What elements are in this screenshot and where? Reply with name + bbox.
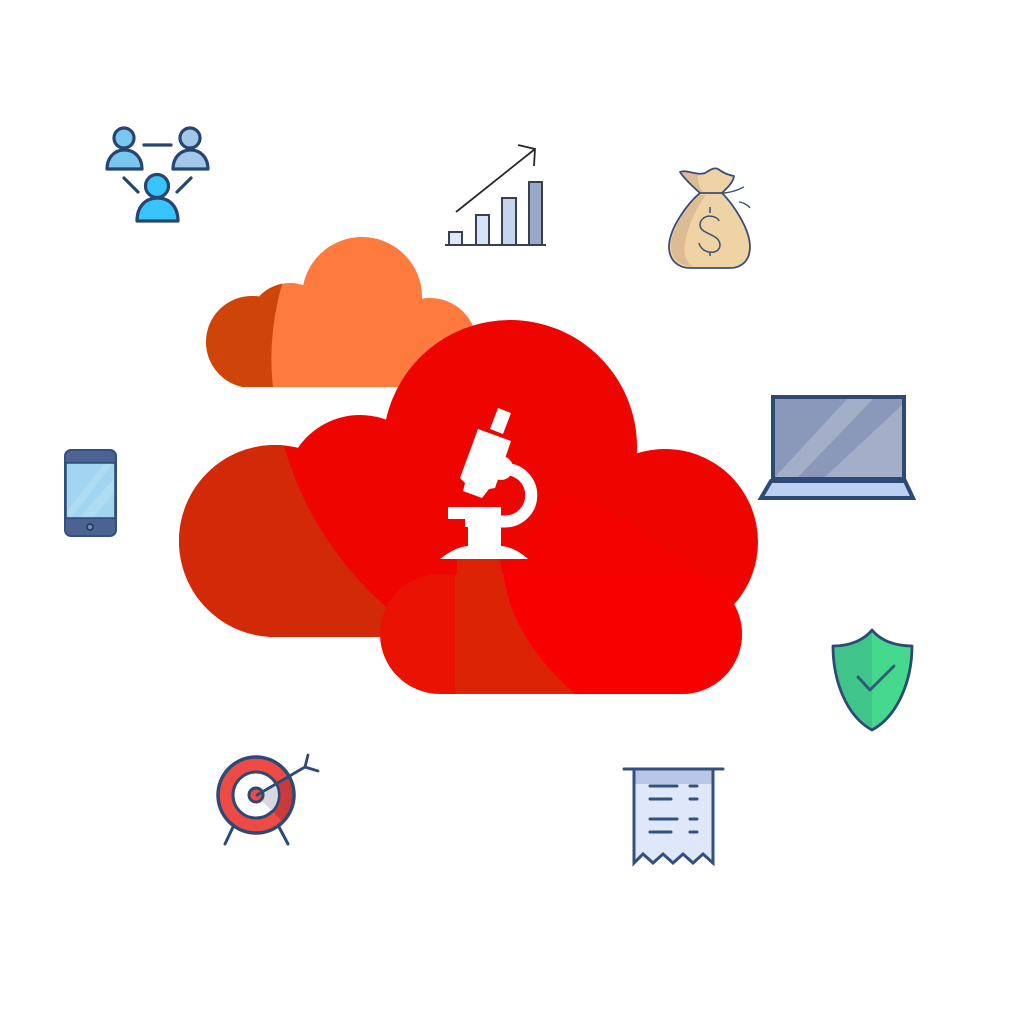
main red cloud — [170, 310, 770, 700]
person bottom — [137, 174, 178, 221]
icon: rising bar chart — [445, 145, 546, 245]
icon: security shield — [833, 630, 912, 730]
front lower cloud — [380, 574, 742, 694]
icon: smartphone — [65, 450, 116, 536]
orange background cloud — [206, 237, 473, 387]
icon: three people network — [107, 128, 208, 221]
infographic canvas — [64, 126, 916, 866]
icon: microscope — [440, 408, 531, 559]
icon: target with arrow — [218, 755, 325, 851]
person left — [107, 128, 142, 169]
person right — [173, 128, 208, 169]
icon: money bag — [669, 168, 750, 268]
icon: receipt — [624, 769, 723, 863]
icon: laptop — [761, 397, 913, 498]
connecting lines — [124, 145, 191, 192]
